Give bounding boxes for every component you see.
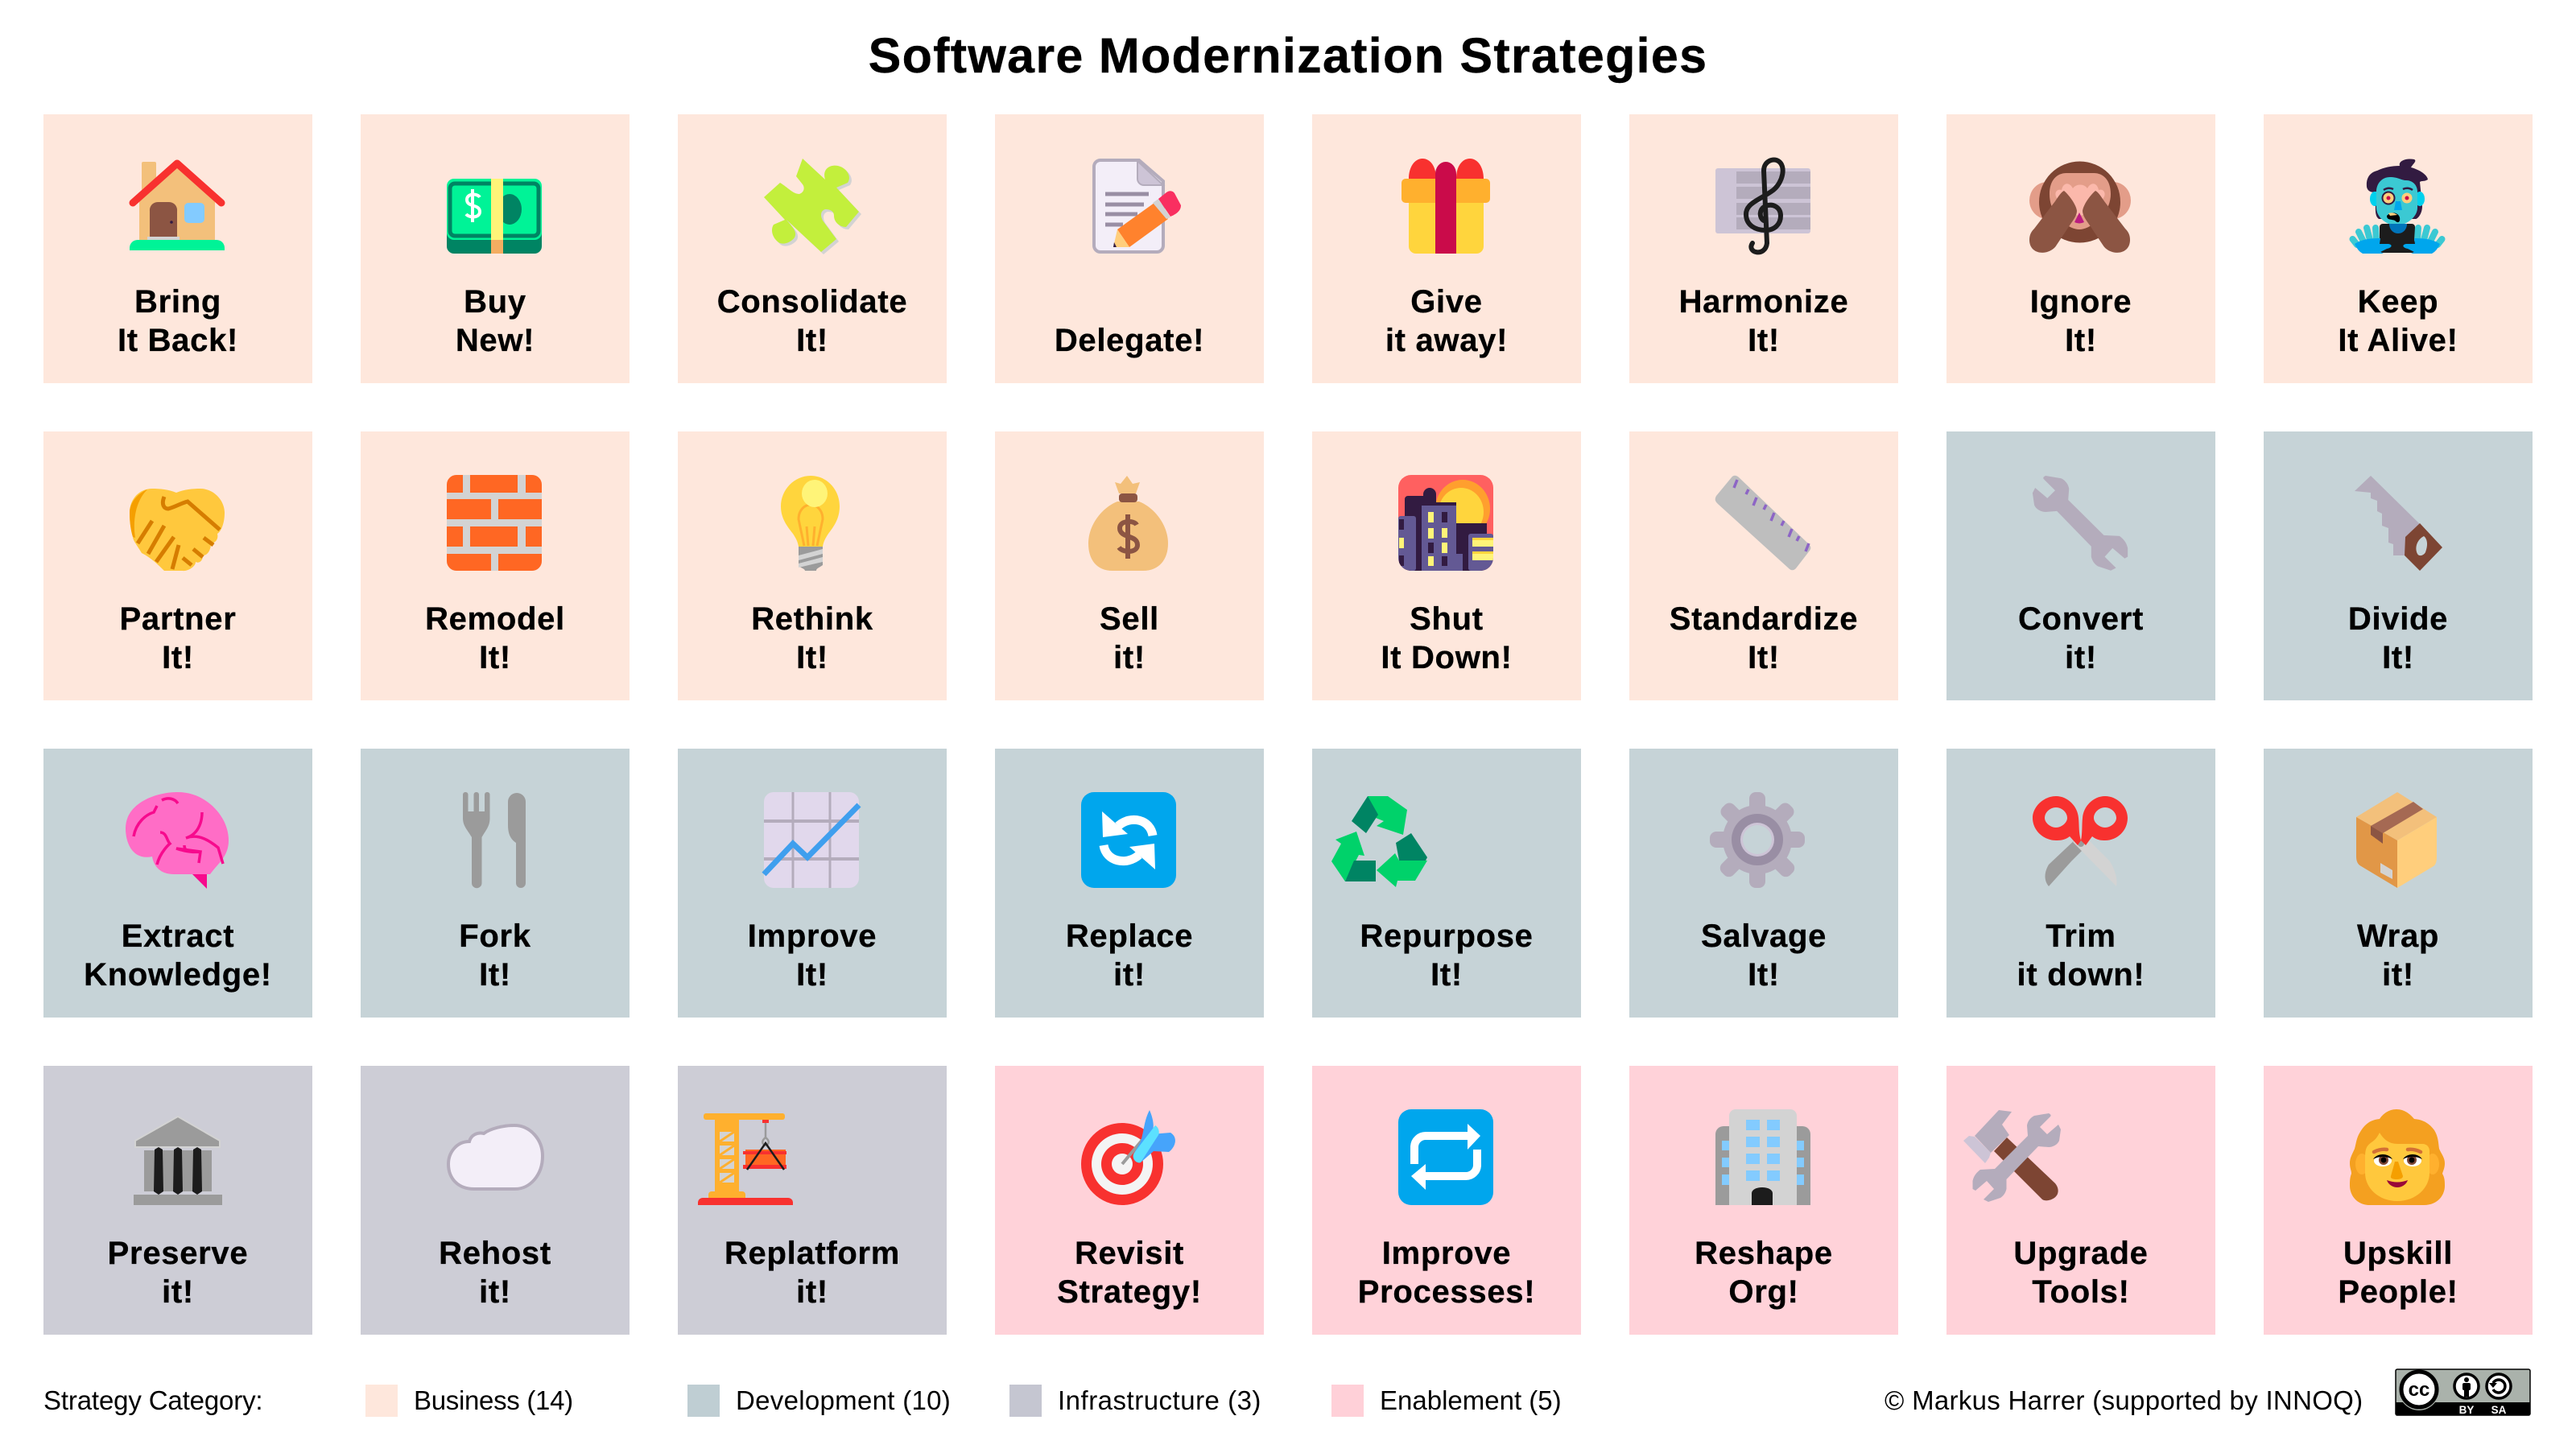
panel: Remodel It	[361, 431, 630, 700]
icon: saw	[2355, 476, 2442, 571]
label: Upskill	[2343, 1236, 2453, 1271]
label	[1629, 917, 1898, 994]
label: Extract	[122, 919, 234, 954]
label	[717, 284, 907, 358]
label: Buy	[464, 284, 526, 320]
icon: see-no-evil monkey	[2029, 161, 2131, 253]
icon: fork and knife	[463, 792, 526, 889]
label: it!	[1113, 640, 1146, 675]
label: it!	[2382, 957, 2414, 993]
label	[2264, 917, 2533, 994]
label: Remodel	[425, 601, 565, 637]
label: it down!	[2017, 957, 2145, 993]
panel: Keep It Alive	[2264, 114, 2533, 383]
label: it!	[479, 1274, 511, 1310]
panel: Divide It	[2264, 431, 2533, 700]
panel: Replatform it	[678, 1066, 947, 1335]
label	[1385, 284, 1508, 358]
panel: Improve Processes	[1312, 1066, 1581, 1335]
legend: swatch infrastructure	[1009, 1385, 1042, 1417]
label: It!	[479, 640, 511, 675]
icon: gear	[1715, 792, 1812, 889]
icon: woman	[2350, 1109, 2446, 1206]
label: It!	[2065, 323, 2097, 358]
icon: CC BY-SA licence badge: cc	[2409, 1379, 2429, 1401]
title: Software Modernization Strategies	[869, 28, 1707, 83]
label	[995, 1234, 1264, 1311]
panel: Standardize It	[1629, 431, 1898, 700]
label	[748, 919, 877, 993]
label: Revisit	[1075, 1236, 1184, 1271]
icon: cloud	[447, 1109, 543, 1206]
icon: classical building	[130, 1109, 226, 1206]
label: Rethink	[751, 601, 873, 637]
icon: package	[2350, 792, 2446, 889]
icon: crane	[697, 1109, 794, 1206]
label: Harmonize	[1679, 284, 1848, 320]
label	[1946, 917, 2215, 994]
label: Reshape	[1695, 1236, 1833, 1271]
label	[120, 601, 236, 675]
panel: Reshape Org	[1629, 1066, 1898, 1335]
icon: scissors	[2033, 792, 2129, 889]
panel: Improve It	[678, 749, 947, 1018]
label: It!	[1748, 323, 1780, 358]
panel: Harmonize It	[1629, 114, 1898, 383]
label: Rehost	[439, 1236, 551, 1271]
label: It!	[796, 957, 828, 993]
label	[1312, 917, 1581, 994]
icon: wrench	[2033, 476, 2128, 571]
label: it!	[162, 1274, 194, 1310]
label: Divide	[2348, 601, 2448, 637]
icon: refresh arrows	[1081, 792, 1176, 888]
label: Shut	[1410, 601, 1484, 637]
icon: light bulb	[781, 476, 840, 571]
icon: gift	[1402, 159, 1490, 254]
panel: Partner It	[43, 431, 312, 700]
icon: hammer and wrench	[1964, 1109, 2061, 1206]
label: Upgrade	[2013, 1236, 2149, 1271]
panel: Salvage It	[1629, 749, 1898, 1018]
icon: zombie	[2349, 159, 2446, 254]
label: It Alive!	[2338, 323, 2458, 358]
label: Salvage	[1701, 919, 1827, 954]
panel: Extract Knowledge	[43, 749, 312, 1018]
label: Sell	[1100, 601, 1159, 637]
label: It!	[2382, 640, 2414, 675]
panel: Bring It Back	[43, 114, 312, 383]
label	[118, 284, 238, 358]
icon: CC BY-SA licence badge: BY	[2459, 1404, 2474, 1416]
label: Partner	[120, 601, 236, 637]
icon: office building	[1715, 1109, 1812, 1206]
label	[425, 601, 565, 675]
icon: ruler	[1715, 475, 1811, 570]
panel: Replace it	[995, 749, 1264, 1018]
label	[751, 601, 873, 675]
legend: label enablement: Enablement (5)	[1380, 1385, 1562, 1415]
label: It!	[1430, 957, 1463, 993]
label: Replace	[1066, 919, 1193, 954]
label: Preserve	[108, 1236, 248, 1271]
label	[1679, 284, 1848, 358]
label: It Down!	[1381, 640, 1513, 675]
panel: Preserve it	[43, 1066, 312, 1335]
label: it!	[2065, 640, 2097, 675]
panel: Wrap it	[2264, 749, 2533, 1018]
label: Give	[1410, 284, 1483, 320]
label	[1946, 1234, 2215, 1311]
label: Convert	[2018, 601, 2144, 637]
panel: Ignore It	[1946, 114, 2215, 383]
icon: treble clef on sheet	[1715, 158, 1810, 254]
panel: Revisit Strategy	[995, 1066, 1264, 1335]
icon: CC BY-SA licence badge	[2396, 1369, 2531, 1416]
label	[2030, 284, 2132, 358]
label: it!	[1113, 957, 1146, 993]
label: Improve	[748, 919, 877, 954]
label: Tools!	[2032, 1274, 2130, 1310]
label: Repurpose	[1360, 919, 1534, 954]
label	[2264, 1234, 2533, 1311]
icon: document and pencil	[1092, 159, 1181, 254]
label	[1066, 919, 1193, 993]
panel: Upskill People	[2264, 1066, 2533, 1335]
label	[2338, 284, 2458, 358]
legend: swatch enablement	[1331, 1385, 1364, 1417]
icon: brain	[126, 792, 229, 889]
label: Consolidate	[717, 284, 907, 320]
label	[2348, 601, 2448, 675]
panel: Upgrade Tools	[1946, 1066, 2215, 1335]
label: New!	[456, 323, 535, 358]
panel: Repurpose It	[1312, 749, 1581, 1018]
icon: CC BY-SA licence badge: SA	[2491, 1404, 2507, 1416]
legend: label development: Development (10)	[736, 1385, 951, 1415]
label	[1381, 601, 1513, 675]
icon: target with dart	[1081, 1109, 1178, 1206]
label: It!	[796, 323, 828, 358]
label	[361, 1234, 630, 1311]
panel: Rehost it	[361, 1066, 630, 1335]
label: Wrap	[2357, 919, 2439, 954]
label	[459, 919, 531, 993]
label: Keep	[2358, 284, 2438, 320]
icon: money bag	[1088, 476, 1168, 571]
label: Trim	[2046, 919, 2116, 954]
label	[1312, 1234, 1581, 1311]
label	[1100, 601, 1159, 675]
label: Strategy!	[1057, 1274, 1202, 1310]
panel: Consolidate It	[678, 114, 947, 383]
panel: Shut It Down	[1312, 431, 1581, 700]
icon: repeat arrows	[1398, 1109, 1495, 1206]
label: Ignore	[2030, 284, 2132, 320]
label: It!	[1748, 640, 1780, 675]
icon: city at dusk	[1398, 475, 1493, 571]
label: Knowledge!	[84, 957, 272, 993]
label: Improve	[1382, 1236, 1511, 1271]
icon: brick wall	[447, 475, 542, 571]
panel: Trim it down	[1946, 749, 2215, 1018]
panel: Sell it	[995, 431, 1264, 700]
icon: puzzle piece	[764, 159, 861, 254]
label	[84, 919, 272, 993]
label: People!	[2338, 1274, 2458, 1310]
label	[2018, 601, 2144, 675]
label: It Back!	[118, 323, 238, 358]
panel: Fork It	[361, 749, 630, 1018]
copyright: © Markus Harrer (supported by INNOQ)	[1885, 1385, 2363, 1415]
label: it away!	[1385, 323, 1508, 358]
icon: house	[129, 159, 225, 250]
label	[43, 1234, 312, 1311]
label: Org!	[1728, 1274, 1799, 1310]
label: Replatform	[724, 1236, 900, 1271]
legend heading: Strategy Category:	[43, 1385, 262, 1415]
icon: chart	[762, 792, 861, 888]
label	[456, 284, 535, 358]
panel: Give it away	[1312, 114, 1581, 383]
icon: money	[447, 179, 542, 254]
label	[1629, 1234, 1898, 1311]
label: it!	[796, 1274, 828, 1310]
label: Standardize	[1670, 601, 1858, 637]
panel: Delegate	[995, 114, 1264, 383]
icon: recycle	[1331, 792, 1428, 889]
label: It!	[796, 640, 828, 675]
panel: Buy New	[361, 114, 630, 383]
label	[678, 1234, 947, 1311]
panel: Rethink It	[678, 431, 947, 700]
label: Delegate!	[1055, 323, 1204, 358]
label: It!	[1748, 957, 1780, 993]
legend: label infrastructure: Infrastructure (3)	[1058, 1385, 1261, 1415]
icon: handshake	[130, 489, 225, 572]
legend: swatch development	[687, 1385, 720, 1417]
label: Bring	[134, 284, 221, 320]
label: Processes!	[1358, 1274, 1535, 1310]
label: It!	[162, 640, 194, 675]
label: It!	[479, 957, 511, 993]
label: Fork	[459, 919, 531, 954]
legend: label business: Business (14)	[414, 1385, 573, 1415]
legend: swatch business	[365, 1385, 398, 1417]
label	[1670, 601, 1858, 675]
panel: Convert it	[1946, 431, 2215, 700]
